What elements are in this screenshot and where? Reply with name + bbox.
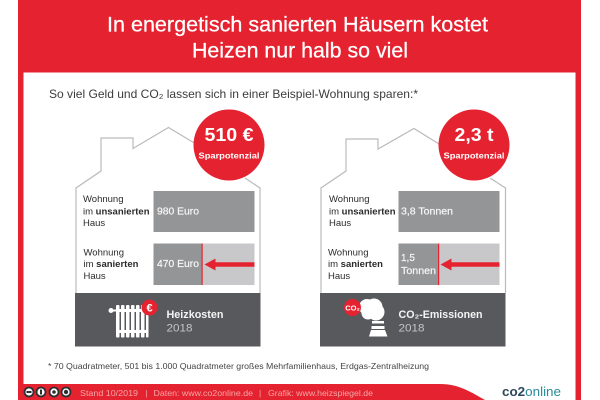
row label: renovated: Haus (328, 271, 350, 282)
row label: renovated: im sanierten (328, 259, 383, 270)
bar: 1,5 Tonnen (398, 244, 500, 285)
footer: source line: Grafik: www.heizspiegel.de (268, 388, 373, 398)
house outline (321, 128, 506, 293)
row label: unrenovated: Haus (83, 218, 105, 229)
savings badge: 2,3 t: 2,3 t (454, 125, 494, 145)
logo: co2online: co2online (502, 384, 561, 399)
savings badge: 2,3 t: Sparpotenzial (444, 152, 504, 160)
savings badge: 510 euro: Sparpotenzial (198, 152, 260, 160)
footer: source line (80, 388, 373, 398)
panel: CO2 emissions house (320, 110, 510, 346)
category band: heating costs: Heizkosten (166, 309, 224, 321)
footer: source line: Daten: www.co2online.de (154, 388, 253, 398)
bar: 1,5 Tonnen: Tonnen (401, 266, 436, 277)
white content panel (24, 72, 576, 400)
row label: renovated: Wohnung (328, 248, 368, 258)
row label: unrenovated: Wohnung (329, 194, 370, 205)
bar: 3,8 Tonnen (398, 191, 500, 232)
title: In energetisch sanierten Häusern kostet (107, 12, 488, 36)
title: Heizen nur halb so viel (192, 38, 408, 62)
arrow (440, 258, 500, 270)
row label: unrenovated: im unsanierten (329, 206, 396, 218)
arrow (204, 258, 254, 270)
row label: unrenovated: Wohnung (83, 194, 124, 205)
bar: 3,8 Tonnen: 3,8 Tonnen (401, 206, 453, 218)
footer: source line: | (146, 388, 148, 398)
footnote: * 70 Quadratmeter, 501 bis 1.000 Quadratmeter großes Mehrfamilienhaus, Erdgas-Zentralheizung (48, 361, 429, 371)
category band: CO2 emissions: 2018 (398, 322, 424, 334)
icon: power plant with CO2 cloud: CO₂ (345, 304, 360, 312)
category band: CO2 emissions: CO₂-Emissionen (398, 309, 483, 321)
intro text: So viel Geld und CO₂ lassen sich in einer Beispiel-Wohnung sparen:* (49, 87, 418, 101)
category band: CO2 emissions (320, 293, 506, 346)
title (107, 12, 488, 62)
row label: renovated: Haus (84, 271, 106, 282)
bar: 470 Euro (154, 244, 254, 285)
icon: radiator with euro: € (146, 302, 153, 314)
house outline (76, 128, 260, 293)
bar: 470 Euro: 470 Euro (157, 259, 199, 270)
row label: unrenovated: im unsanierten (83, 206, 150, 218)
category band: heating costs (75, 293, 260, 346)
icon: radiator with euro (108, 300, 158, 338)
footer: source line: | (259, 388, 261, 398)
icon: power plant with CO2 cloud (344, 298, 388, 336)
footer: licence icons (24, 388, 70, 396)
bar: 1,5 Tonnen: 1,5 (401, 253, 415, 264)
bar: 980 Euro: 980 Euro (157, 206, 199, 218)
savings badge: 510 euro (194, 110, 264, 180)
footer: source line: Stand 10/2019 (80, 388, 138, 398)
row label: unrenovated: Haus (329, 218, 351, 229)
category band: heating costs: 2018 (166, 322, 192, 334)
savings badge: 510 euro: 510 € (204, 125, 254, 145)
panel: heating costs house (75, 110, 264, 346)
row label: renovated: Wohnung (84, 248, 124, 258)
savings badge: 2,3 t (438, 110, 510, 180)
row label: renovated: im sanierten (84, 259, 138, 270)
bar: 980 Euro (154, 191, 254, 232)
